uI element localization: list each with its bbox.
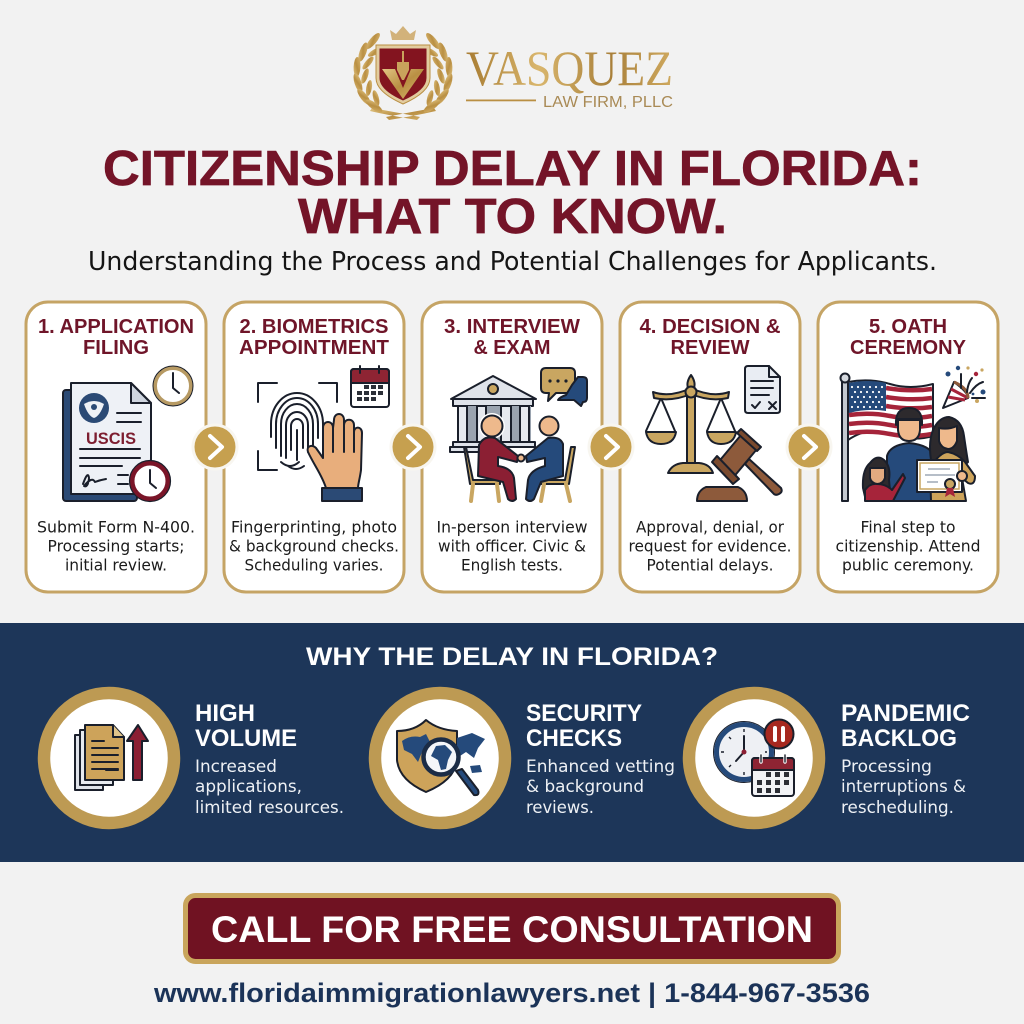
panel: step 4 decision and review	[620, 302, 800, 592]
call to action button: CALL FOR FREE CONSULTATION	[211, 908, 813, 950]
icon: shield, world map and magnifier	[375, 693, 505, 823]
step 1 description	[37, 518, 195, 574]
step 2 description: & background checks.	[229, 536, 399, 556]
logo wordmark: VASQUEZ	[466, 40, 673, 96]
step 1 description: Submit Form N-400.	[37, 518, 195, 536]
panel: step 5 oath ceremony	[818, 302, 998, 592]
panel: why the delay	[0, 623, 1024, 862]
step 5 description: citizenship. Attend	[836, 536, 980, 556]
step 2 description: Scheduling varies.	[244, 556, 384, 574]
icon: clock, pause and calendar	[689, 693, 819, 823]
step 4 heading: REVIEW	[670, 337, 750, 359]
icon: crown	[390, 26, 416, 40]
step 4 description: Potential delays.	[646, 556, 774, 574]
subtitle: Understanding the Process and Potential Challenges for Applicants.	[88, 247, 937, 277]
text: pandemic backlog: interruptions &	[841, 777, 966, 796]
icon: courthouse interview	[450, 368, 587, 501]
step 5 heading: CEREMONY	[850, 337, 967, 359]
text: security checks: SECURITY	[526, 700, 642, 727]
call to action button	[186, 896, 838, 962]
step 5 description: Final step to	[860, 518, 956, 536]
icon: USCIS form with clocks: USCIS	[86, 430, 136, 448]
icon: fingerprint and hand	[258, 366, 389, 501]
arrow: step 3 to 4	[588, 424, 634, 470]
step 1 heading: 1. APPLICATION	[38, 316, 194, 338]
text: security checks: reviews.	[526, 798, 594, 817]
logo rule	[466, 100, 536, 101]
section heading: WHY THE DELAY IN FLORIDA?	[306, 643, 718, 671]
step 1 description: Processing starts;	[48, 536, 184, 556]
text: security checks: & background	[526, 777, 644, 796]
text: security checks	[526, 700, 675, 817]
title: WHAT TO KNOW.	[298, 190, 727, 244]
step 3 heading	[444, 316, 580, 359]
step 5 heading	[850, 316, 967, 359]
arrow: step 4 to 5	[786, 424, 832, 470]
logo subtitle: LAW FIRM, PLLC	[543, 94, 673, 111]
icon: laurel wreath	[352, 31, 454, 120]
icon: scales, gavel and document	[646, 366, 782, 501]
arrow: step 1 to 2	[192, 424, 238, 470]
contact line: www.floridaimmigrationlawyers.net | 1-844-967-3536	[153, 978, 870, 1008]
step 3 heading: & EXAM	[474, 337, 550, 359]
title: CITIZENSHIP DELAY IN FLORIDA:	[103, 142, 922, 196]
step 1 heading: FILING	[83, 337, 149, 359]
arrow: step 2 to 3	[390, 424, 436, 470]
panel: step 3 interview and exam	[422, 302, 602, 592]
text: high volume: limited resources.	[195, 798, 344, 817]
step 5 description	[836, 518, 980, 574]
step 2 heading: 2. BIOMETRICS	[240, 316, 388, 338]
panel: step 1 application filing	[26, 302, 206, 592]
icon: flag and family	[840, 366, 986, 501]
icon: USCIS form with clocks	[63, 366, 193, 502]
step 3 heading: 3. INTERVIEW	[444, 316, 580, 338]
step 5 description: public ceremony.	[842, 556, 974, 574]
step 3 description: English tests.	[461, 556, 563, 574]
step 4 heading	[640, 316, 780, 359]
text: high volume: applications,	[195, 777, 302, 796]
text: high volume	[195, 700, 344, 817]
icon: documents with up arrow	[44, 693, 174, 823]
step 2 description: Fingerprinting, photo	[231, 518, 397, 536]
text: pandemic backlog: BACKLOG	[841, 725, 957, 752]
text: pandemic backlog: PANDEMIC	[841, 700, 970, 727]
logo: Vasquez Law Firm	[352, 26, 673, 120]
step 4 description: Approval, denial, or	[636, 518, 784, 536]
step 3 description: with officer. Civic &	[438, 536, 586, 556]
text: pandemic backlog: rescheduling.	[841, 798, 954, 817]
step 1 heading	[38, 316, 194, 359]
step 1 description: initial review.	[65, 556, 167, 574]
step 4 heading: 4. DECISION &	[640, 316, 780, 338]
step 2 heading: APPOINTMENT	[239, 337, 389, 359]
arrows between steps	[192, 424, 832, 470]
step 3 description	[436, 518, 588, 574]
text: high volume: HIGH	[195, 700, 255, 727]
step 5 heading: 5. OATH	[869, 316, 947, 338]
panel: step 2 biometrics appointment	[224, 302, 404, 592]
step 2 heading	[239, 316, 389, 359]
icon: shield	[376, 45, 430, 104]
text: security checks: Enhanced vetting	[526, 757, 675, 776]
step 4 description	[628, 518, 792, 574]
text: pandemic backlog: Processing	[841, 757, 932, 776]
title	[103, 142, 922, 244]
text: security checks: CHECKS	[526, 725, 622, 752]
step 3 description: In-person interview	[436, 518, 588, 536]
step 2 description	[229, 518, 399, 574]
text: high volume: VOLUME	[195, 725, 297, 752]
step 4 description: request for evidence.	[628, 536, 792, 556]
text: high volume: Increased	[195, 757, 277, 776]
text: pandemic backlog	[841, 700, 970, 817]
